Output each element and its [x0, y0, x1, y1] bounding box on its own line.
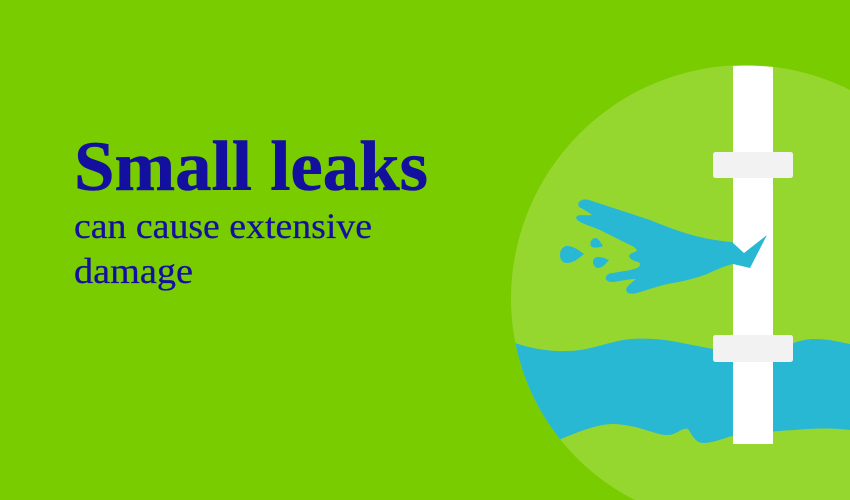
water jet from crack	[576, 199, 767, 294]
illustration: leaking pipe in circle	[505, 65, 850, 500]
lower clamp	[713, 335, 793, 362]
upper clamp	[713, 152, 793, 178]
pipe	[733, 66, 773, 444]
small droplet	[590, 238, 603, 248]
flood water	[505, 339, 850, 448]
large droplet	[560, 246, 584, 263]
subtitle	[74, 206, 372, 291]
title: Small leaks	[74, 128, 428, 206]
medium droplet	[593, 257, 609, 268]
subtitle: can cause extensive	[74, 206, 372, 246]
light green circle	[511, 65, 850, 500]
subtitle: damage	[74, 251, 193, 291]
